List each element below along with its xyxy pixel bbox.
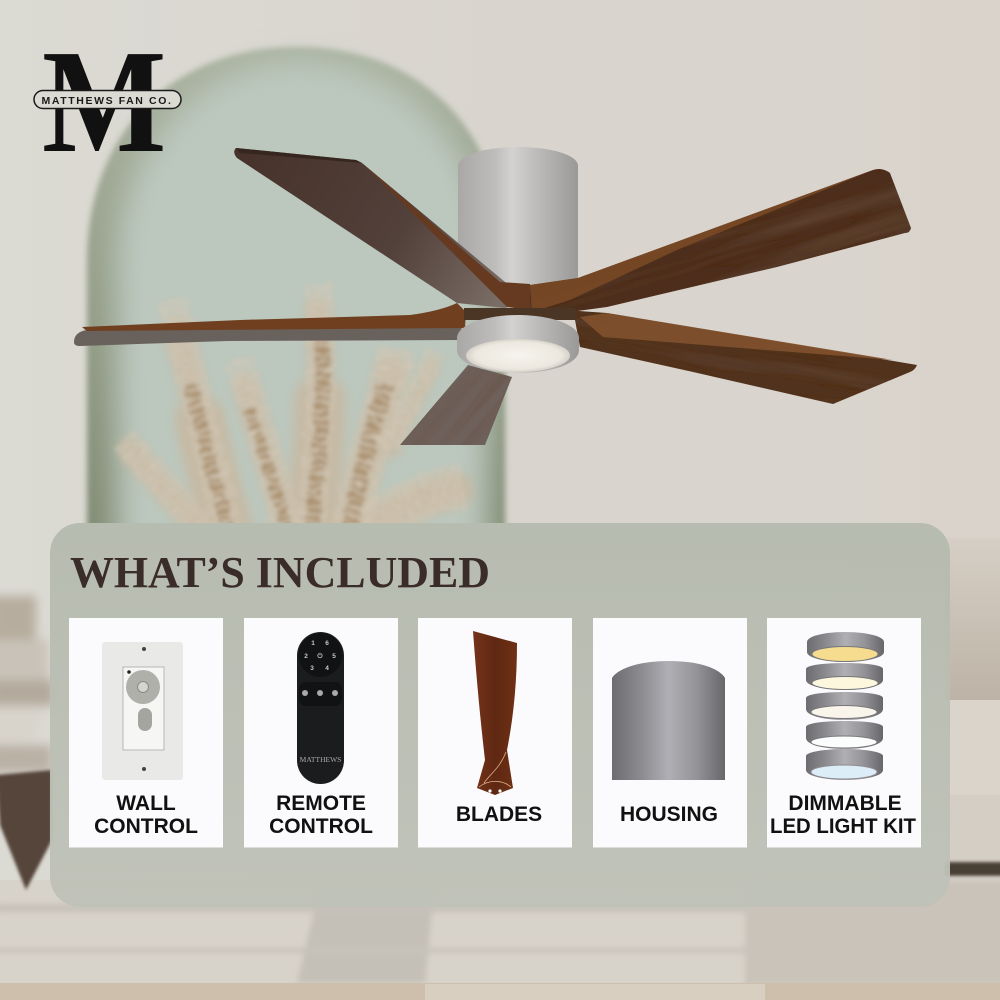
icon: remote: MATTHEWS [300, 755, 341, 764]
icon: housing cylinder [612, 661, 725, 780]
blade: bottom [400, 365, 512, 445]
label: WALL [116, 792, 176, 815]
card: housing [593, 618, 747, 848]
hub shadow [464, 308, 576, 320]
brand logo [34, 20, 181, 184]
logo letter M: M [42, 20, 166, 184]
card: dimmable led light kit [767, 618, 921, 848]
card: blades [418, 618, 572, 848]
what's included panel [50, 523, 950, 907]
icon: remote: 5 [332, 653, 336, 660]
icon: remote: 2 [304, 653, 308, 660]
icon: wall control [102, 642, 183, 780]
label: HOUSING [620, 803, 718, 826]
floor [0, 880, 1000, 1000]
label: LED LIGHT KIT [770, 815, 916, 838]
icon: remote: 4 [325, 665, 329, 672]
icon: remote [297, 632, 344, 784]
led light [466, 339, 570, 372]
blade: top left [234, 148, 530, 308]
logo name pill [34, 90, 181, 108]
icon: remote: ⏻ [317, 652, 323, 660]
card: remote control [244, 618, 398, 848]
label: CONTROL [269, 815, 373, 838]
icon: led colour stack [806, 632, 884, 780]
icon: remote: 6 [325, 640, 329, 647]
label: DIMMABLE [788, 792, 902, 815]
icon: remote: 1 [311, 640, 315, 647]
pampas soft base [130, 310, 455, 530]
blade: left [74, 303, 466, 346]
heading: WHAT’S INCLUDED [70, 548, 490, 597]
icon: remote: 3 [310, 665, 314, 672]
ceiling fan [74, 147, 917, 445]
label: CONTROL [94, 815, 198, 838]
light fixture ring [457, 315, 579, 373]
icon: blade [473, 631, 517, 795]
left sofa and plant [0, 596, 54, 890]
label: BLADES [456, 803, 542, 826]
pampas grass [125, 285, 462, 530]
label: REMOTE [276, 792, 366, 815]
blade: top right [530, 169, 911, 311]
right sofa [945, 538, 1000, 876]
logo name pill: MATTHEWS FAN CO. [42, 95, 172, 107]
arched wall niche [87, 47, 505, 560]
card: wall control [69, 618, 223, 848]
blade: lower right [575, 311, 917, 404]
fan housing [458, 147, 578, 292]
